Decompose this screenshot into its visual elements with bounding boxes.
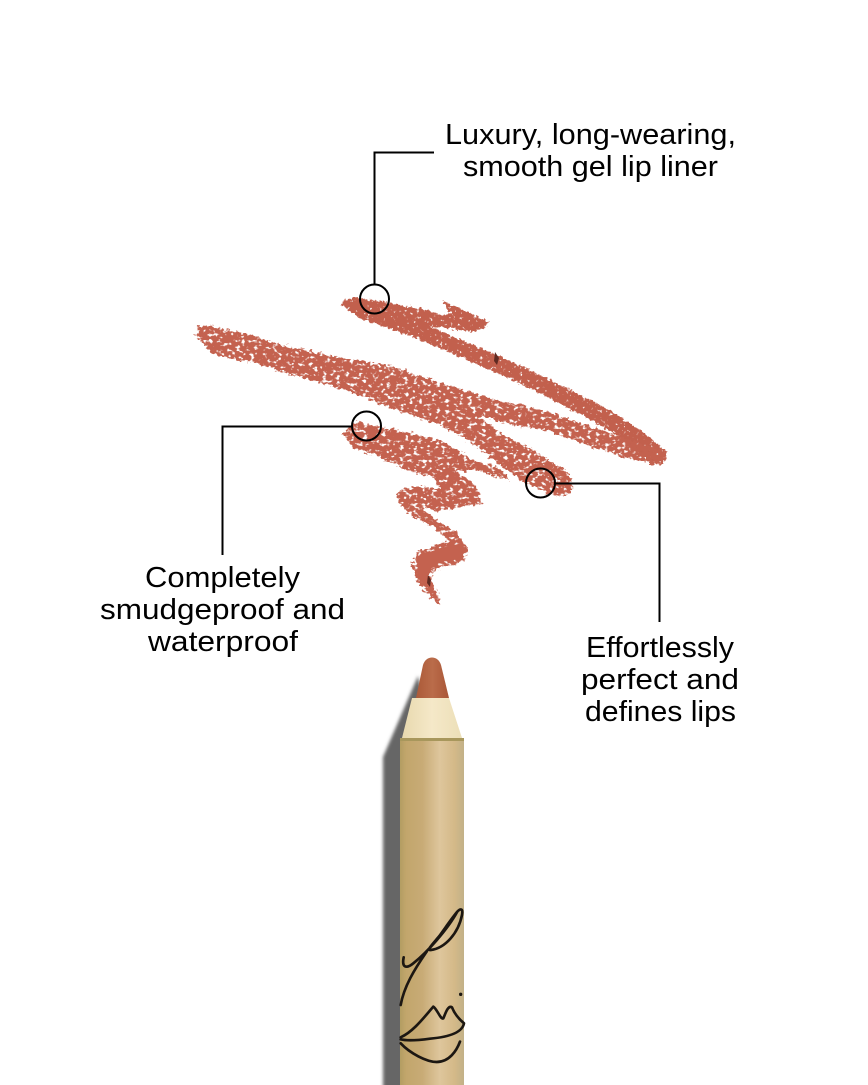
- callout: smudgeproof: [100, 412, 381, 658]
- icon: signature and lips logo: [401, 909, 464, 1062]
- leader line right: [555, 484, 660, 622]
- callout text right: Effortlessly: [586, 632, 735, 664]
- swatch: solid core of zigzag tail: [417, 543, 463, 595]
- pencil barrel: [400, 738, 464, 1085]
- callout text top: smooth gel lip liner: [463, 151, 718, 183]
- pencil shadow: [383, 676, 424, 1085]
- callout text left: waterproof: [147, 626, 299, 658]
- callout text left: [100, 562, 345, 658]
- pencil lead tip: [416, 658, 449, 698]
- barrel top band: [400, 738, 464, 741]
- pencil wood: [402, 698, 462, 738]
- lip liner swatch: [195, 298, 667, 603]
- swatch: upper stroke: [342, 298, 667, 463]
- callout: long-wearing liner: [360, 119, 736, 314]
- callout text left: Completely: [145, 562, 301, 594]
- marker circle top: [360, 284, 389, 314]
- callout text top: [445, 119, 736, 183]
- swatch dark flecks: [427, 352, 499, 587]
- callout text left: smudgeproof and: [100, 594, 345, 626]
- leader line top: [374, 152, 434, 284]
- swatch: long return stroke: [195, 325, 667, 497]
- marker circle left: [352, 412, 381, 440]
- callout text right: defines lips: [585, 696, 736, 728]
- marker circle right: [526, 468, 555, 498]
- callout: defines lips: [526, 468, 739, 728]
- callout text right: perfect and: [581, 664, 739, 696]
- callout text top: Luxury, long-wearing,: [445, 119, 736, 151]
- pencil: [383, 658, 464, 1085]
- callout text right: [581, 632, 739, 728]
- leader line left: [222, 426, 352, 555]
- swatch: lower zigzag stroke: [343, 422, 510, 603]
